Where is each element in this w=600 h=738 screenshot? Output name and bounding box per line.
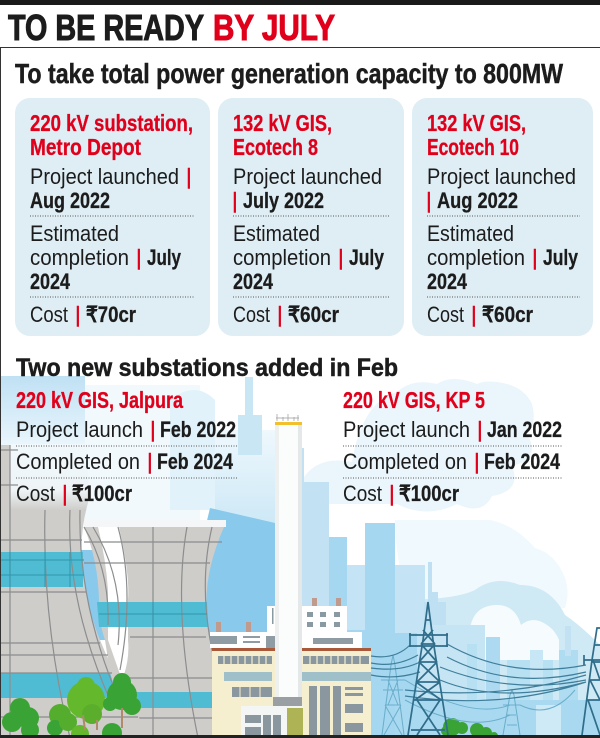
- block: KP 5: |: [474, 449, 480, 474]
- cooling tower left: [0, 444, 152, 738]
- block: Jalpura: Feb 2022: [160, 417, 236, 442]
- panel: card 2: Estimated: [233, 221, 320, 246]
- block: Jalpura: ₹100cr: [72, 481, 132, 506]
- block: KP 5: Cost: [343, 481, 382, 506]
- panel: card 2: Project launched: [233, 164, 382, 189]
- panel: card 3: July: [543, 245, 579, 270]
- background skyscrapers: [300, 448, 600, 738]
- title: BY JULY: [213, 7, 335, 48]
- panel: card 1: |: [136, 245, 142, 270]
- block: KP 5: |: [389, 481, 395, 506]
- panel: card 3: |: [426, 188, 432, 213]
- illustration: power plant skyline: [0, 376, 600, 738]
- block: Jalpura: |: [150, 417, 156, 442]
- panel: card 2: |: [232, 188, 238, 213]
- panel: card 1: July: [147, 245, 182, 270]
- panel: card 1: 220 kV substation,: [30, 110, 193, 136]
- panel: card 1: ₹70cr: [86, 302, 136, 327]
- panel: card 2: July 2022: [243, 188, 324, 213]
- panel: card 2: completion: [233, 245, 331, 270]
- block: Jalpura: |: [62, 481, 68, 506]
- block: Jalpura: Completed on: [16, 449, 140, 474]
- block: KP 5: [343, 387, 563, 506]
- panel: card 1: completion: [30, 245, 129, 270]
- block: KP 5: Jan 2022: [487, 417, 562, 442]
- block: Jalpura: Project launch: [16, 417, 143, 442]
- panel: card 3: 132 kV GIS,: [427, 110, 526, 136]
- panel: card 1: |: [186, 164, 192, 189]
- transmission pylons and wires: [371, 602, 600, 735]
- top black bar: [0, 0, 600, 5]
- block: Jalpura: [16, 387, 237, 506]
- panel: card 2: [218, 98, 404, 336]
- panel: card 3: Ecotech 10: [427, 134, 519, 160]
- panel: card 3: ₹60cr: [482, 302, 533, 327]
- panel: card 3: completion: [427, 245, 525, 270]
- block: Jalpura: Cost: [16, 481, 55, 506]
- title: TO BE READY: [8, 7, 204, 48]
- panel: card 3: [412, 98, 593, 336]
- panel: card 2: Cost: [233, 302, 270, 327]
- trees: [2, 673, 498, 738]
- block: KP 5: ₹100cr: [399, 481, 459, 506]
- panel: card 1: Project launched: [30, 164, 179, 189]
- panel: card 2: ₹60cr: [288, 302, 339, 327]
- panel: card 3: Project launched: [427, 164, 576, 189]
- block: KP 5: 220 kV GIS, KP 5: [343, 387, 485, 413]
- block: Jalpura: Feb 2024: [157, 449, 234, 474]
- panel: card 1: Aug 2022: [30, 188, 110, 213]
- panel: card 1: [15, 98, 210, 336]
- block: KP 5: Completed on: [343, 449, 467, 474]
- clouds and smoke: [0, 376, 600, 738]
- panel: card 2: |: [277, 302, 283, 327]
- panel: card 1: Estimated: [30, 221, 119, 246]
- block: KP 5: Feb 2024: [484, 449, 561, 474]
- panel: card 3: 2024: [427, 269, 468, 294]
- panel: card 3: Estimated: [427, 221, 514, 246]
- panel: card 3: Aug 2022: [437, 188, 518, 213]
- panel: card 2: July: [349, 245, 385, 270]
- panel: card 1: Cost: [30, 302, 68, 327]
- panel: card 1: Metro Depot: [30, 134, 141, 160]
- panel: card 3: |: [471, 302, 477, 327]
- panel: card 2: 132 kV GIS,: [233, 110, 332, 136]
- panel: card 3: Cost: [427, 302, 464, 327]
- plant buildings: [210, 598, 371, 738]
- cooling tower right: [84, 520, 254, 738]
- block: Jalpura: 220 kV GIS, Jalpura: [16, 387, 183, 413]
- panel: card 1: |: [75, 302, 81, 327]
- panel: card 3: |: [532, 245, 538, 270]
- block: KP 5: Project launch: [343, 417, 470, 442]
- block: Jalpura: |: [147, 449, 153, 474]
- chimney: [275, 414, 302, 697]
- panel: card 1: 2024: [30, 269, 71, 294]
- far pylons: [381, 655, 575, 735]
- panel: card 2: 2024: [233, 269, 274, 294]
- panel: card 2: Ecotech 8: [233, 134, 318, 160]
- block: KP 5: |: [477, 417, 483, 442]
- heading: new substations: Two new substations added in Feb: [16, 354, 398, 382]
- blue sky behind plant: [60, 508, 275, 640]
- panel: card 2: |: [338, 245, 344, 270]
